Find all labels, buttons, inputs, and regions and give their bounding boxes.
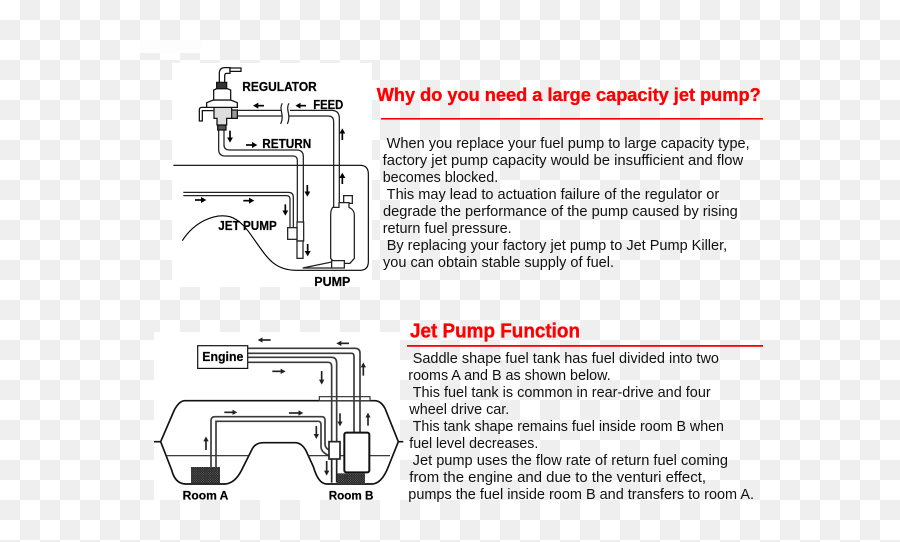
text block: why large capacity explanation: return fuel pressure. bbox=[383, 221, 512, 237]
text block: jet pump function explanation: rooms A and B as shown below. bbox=[408, 368, 611, 384]
jet pump body bbox=[329, 442, 340, 483]
label: room A: Room A bbox=[183, 488, 229, 502]
label: pump: PUMP bbox=[314, 275, 350, 289]
flow arrows bbox=[206, 340, 368, 472]
text block: why large capacity explanation: you can obtain stable supply of fuel. bbox=[383, 255, 614, 271]
jet pump transfer pipe bbox=[183, 192, 293, 228]
panel: fuel system diagram bbox=[172, 63, 372, 289]
regulator bbox=[199, 68, 241, 130]
pipe break mark bbox=[281, 103, 289, 124]
text block: why large capacity explanation: By replacing your factory jet pump to Jet Pump Killer, bbox=[387, 238, 727, 254]
label: room B: Room B bbox=[329, 488, 374, 502]
label: jet pump: JET PUMP bbox=[218, 219, 277, 233]
engine box bbox=[198, 346, 248, 368]
text block: why large capacity explanation: When you replace your fuel pump to large capacity type, bbox=[387, 136, 750, 152]
text block: jet pump function explanation: pumps the fuel inside room B and transfers to room A. bbox=[408, 487, 754, 503]
text block: why large capacity explanation: becomes blocked. bbox=[383, 170, 498, 186]
label: feed: FEED bbox=[313, 98, 343, 112]
panel: saddle tank diagram bbox=[154, 332, 403, 502]
text block: why large capacity explanation: factory jet pump capacity would be insufficient and flow bbox=[383, 153, 744, 169]
fuel pump bbox=[344, 433, 369, 472]
tank access plate bbox=[319, 397, 370, 401]
text block: why large capacity explanation: This may lead to actuation failure of the regulator or bbox=[387, 187, 719, 203]
engine pipes bbox=[248, 348, 360, 442]
fuel tank outline bbox=[173, 165, 368, 270]
fuel pump bbox=[303, 196, 354, 268]
text block: jet pump function explanation: This fuel tank is common in rear-drive and four bbox=[413, 385, 711, 401]
feed pipe bbox=[237, 110, 339, 207]
text block: jet pump function explanation: from the engine and due to the venturi effect, bbox=[409, 470, 706, 486]
text block: jet pump function explanation bbox=[408, 351, 754, 503]
filter: room B bbox=[337, 473, 365, 484]
return pipe bbox=[219, 130, 303, 222]
heading: jet pump function: Jet Pump Function bbox=[410, 321, 580, 343]
text block: why large capacity explanation: degrade the performance of the pump caused by rising bbox=[383, 204, 738, 220]
text block: jet pump function explanation: This tank shape remains fuel inside room B when bbox=[413, 419, 724, 435]
text block: why large capacity explanation bbox=[383, 136, 750, 271]
jet pump body bbox=[288, 222, 304, 258]
text block: jet pump function explanation: Saddle shape fuel tank has fuel divided into two bbox=[413, 351, 719, 367]
text block: jet pump function explanation: wheel drive car. bbox=[408, 402, 509, 418]
text block: jet pump function explanation: fuel level decreases. bbox=[409, 436, 538, 452]
saddle fuel tank outline bbox=[154, 401, 403, 484]
text block: jet pump function explanation: Jet pump uses the flow rate of return fuel coming bbox=[413, 453, 728, 469]
label: regulator: REGULATOR bbox=[242, 80, 317, 94]
label: return: RETURN bbox=[262, 137, 311, 151]
heading: why large capacity: Why do you need a large capacity jet pump? bbox=[377, 84, 761, 105]
transfer pipe bbox=[211, 417, 331, 467]
engine box: Engine bbox=[202, 349, 243, 364]
filter: room A bbox=[191, 467, 220, 484]
fuel level line bbox=[167, 454, 390, 457]
flow arrows bbox=[195, 106, 342, 252]
